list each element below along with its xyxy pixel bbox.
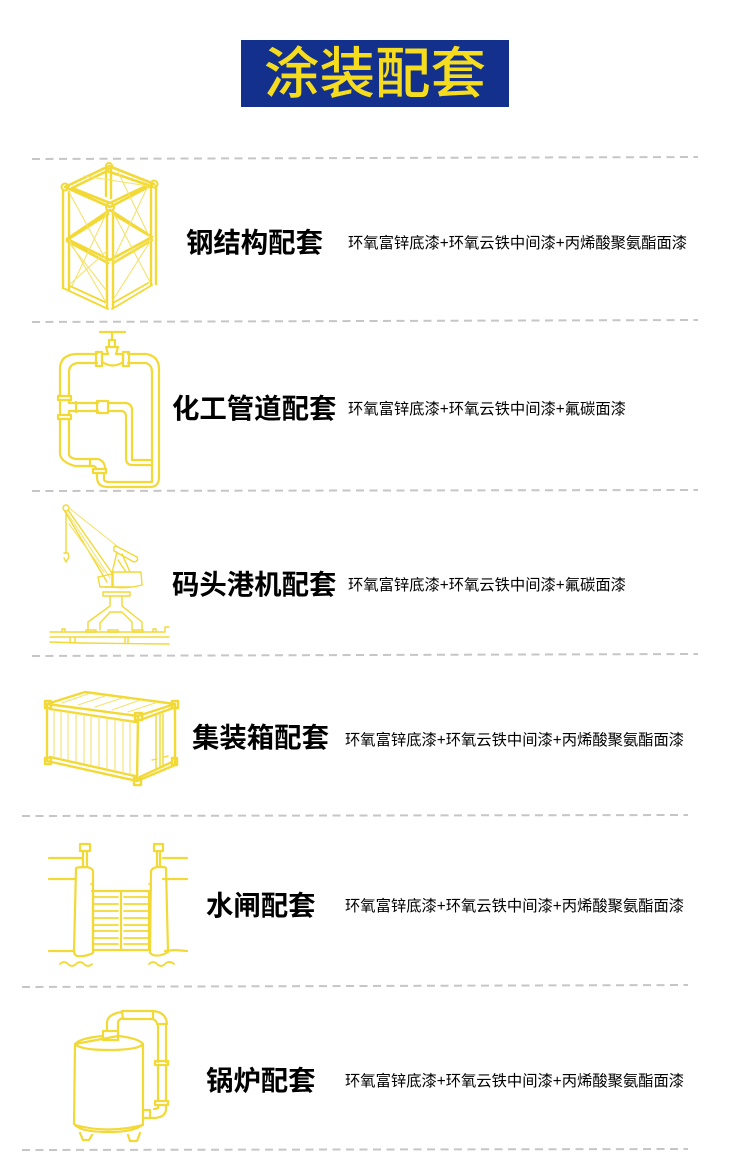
description: sluice gate: 环氧富锌底漆+环氧云铁中间漆+丙烯酸聚氨酯面漆 <box>345 897 684 915</box>
description: container: 环氧富锌底漆+环氧云铁中间漆+丙烯酸聚氨酯面漆 <box>345 731 684 749</box>
description: chemical pipeline: 环氧富锌底漆+环氧云铁中间漆+氟碳面漆 <box>348 400 626 418</box>
heading: sluice gate: 水闸配套 <box>206 890 316 921</box>
panel: steel structure <box>62 163 687 309</box>
heading: chemical pipeline: 化工管道配套 <box>172 393 336 424</box>
panel: chemical pipeline <box>58 332 626 487</box>
heading: steel structure: 钢结构配套 <box>186 227 323 258</box>
heading: port machinery: 码头港机配套 <box>172 569 336 600</box>
icon: sluice gate <box>49 844 187 966</box>
panel: boiler <box>74 1011 684 1141</box>
icon: port crane <box>50 505 169 644</box>
icon: shipping container <box>45 692 178 785</box>
description: port machinery: 环氧富锌底漆+环氧云铁中间漆+氟碳面漆 <box>348 576 626 594</box>
heading: boiler: 锅炉配套 <box>206 1065 316 1096</box>
panel: sluice gate <box>49 844 684 966</box>
panel: port machinery <box>50 505 626 644</box>
description: steel structure: 环氧富锌底漆+环氧云铁中间漆+丙烯酸聚氨酯面漆 <box>348 234 687 252</box>
heading: container: 集装箱配套 <box>192 722 329 753</box>
icon: pipes and valve <box>58 332 159 487</box>
icon: boiler <box>74 1011 168 1141</box>
description: boiler: 环氧富锌底漆+环氧云铁中间漆+丙烯酸聚氨酯面漆 <box>345 1072 684 1090</box>
title: 涂装配套 <box>264 29 486 109</box>
icon: steel tower <box>62 163 158 309</box>
panel: container <box>45 692 684 785</box>
